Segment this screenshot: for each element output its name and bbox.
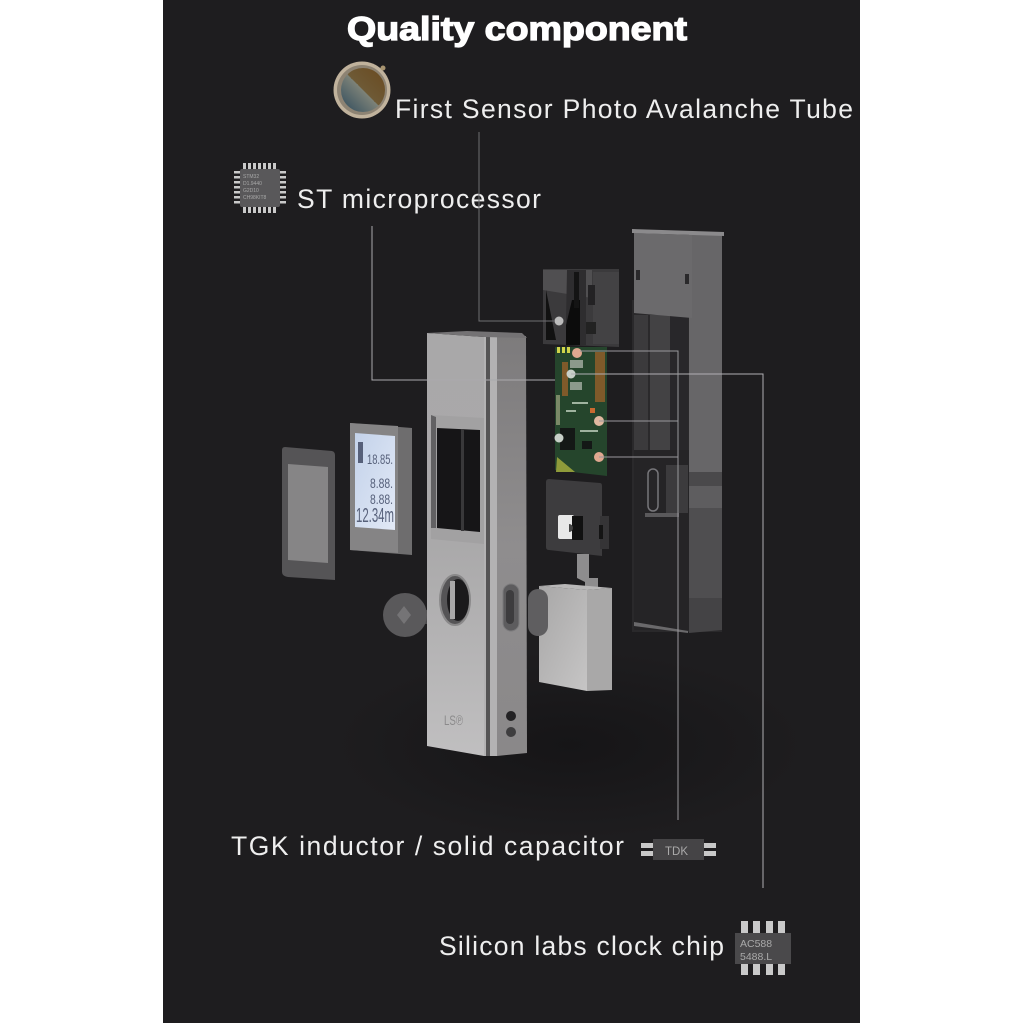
leader line: microprocessor	[372, 226, 555, 380]
icon: ST microprocessor chip: G2D10	[243, 188, 259, 194]
battery	[528, 584, 612, 691]
main body: LS℗	[444, 712, 463, 728]
leader line: clock chip	[571, 374, 763, 888]
icon: clock chip	[735, 921, 791, 975]
icon: photo avalanche tube sensor	[334, 62, 390, 118]
icon: TDK inductor	[641, 839, 716, 860]
PCB	[554, 347, 607, 476]
leader line: sensor	[479, 132, 555, 321]
button	[383, 593, 427, 637]
label: ST microprocessor: ST microprocessor	[297, 184, 541, 214]
leader lines: inductor and capacitor	[580, 351, 678, 820]
LCD display module: 8.88.	[370, 475, 393, 491]
optical block	[543, 269, 619, 347]
label: Silicon labs clock chip: Silicon labs clock chip	[439, 931, 724, 961]
LCD display module: 18.85.	[367, 451, 393, 467]
icon: ST microprocessor chip	[234, 163, 286, 213]
LCD display module: 12.34m	[356, 505, 394, 527]
back housing	[632, 229, 724, 633]
title: Quality component	[347, 10, 687, 47]
connector board	[546, 479, 609, 556]
dark background panel	[163, 0, 860, 1023]
icon: clock chip: AC588	[740, 938, 772, 950]
icon: TDK inductor: TDK	[665, 846, 688, 858]
LCD display module: 8.88.	[370, 491, 393, 507]
icon: ST microprocessor chip: D1.9440	[243, 181, 262, 187]
icon: ST microprocessor chip: CH98KIT8	[243, 195, 267, 201]
icon: ST microprocessor chip: STM32	[243, 174, 259, 180]
icon: clock chip: 5488.L	[740, 951, 772, 963]
LCD display module	[350, 423, 412, 555]
label: first sensor: First Sensor Photo Avalanche Tube	[395, 94, 853, 124]
back plate	[282, 447, 335, 580]
exploded product assembly	[282, 229, 724, 756]
main body	[427, 331, 527, 756]
flex cable	[577, 554, 598, 588]
label: TGK inductor: TGK inductor / solid capacitor	[231, 831, 624, 861]
